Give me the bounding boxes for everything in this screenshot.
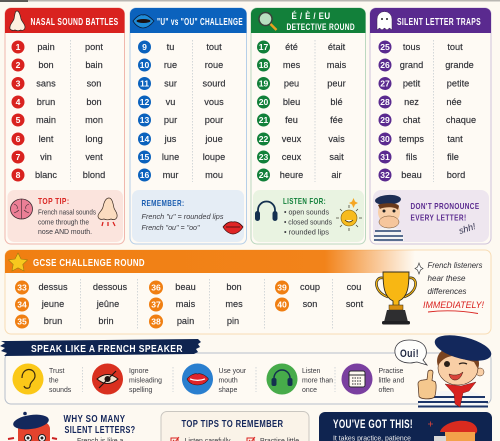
word pairs 17-24: peur (327, 78, 346, 88)
icon: blue lips (133, 15, 154, 28)
heading: detective round: É / È / EU (292, 11, 330, 22)
word pairs 25-32: chat (403, 115, 421, 125)
icon: character with red beret (434, 421, 477, 441)
word pairs 25-32: petit (403, 78, 421, 88)
word pairs 25-32: chaque (446, 115, 476, 125)
tip: use your mouth shape: Use your (218, 368, 247, 375)
panel: silent letter traps (370, 8, 491, 244)
word pairs 17-24: feu (285, 115, 298, 125)
callout: top tip (8, 190, 123, 242)
word pairs 9-16 (138, 40, 225, 182)
tip: use your mouth shape: mouth (218, 378, 238, 384)
callout: listen for (253, 190, 364, 242)
word pairs 25-32: 30 (380, 134, 390, 144)
icon: trophy (376, 272, 416, 324)
word pairs 1-8: lent (39, 134, 54, 144)
callout: remember (132, 190, 244, 242)
word pairs 17-24: 18 (259, 60, 268, 70)
word pairs 1-8: bon (38, 60, 54, 70)
word pairs 17-24: 20 (259, 97, 268, 107)
callout: remember: French "ou" = "oo" (142, 225, 200, 232)
word pairs 33-40: 35 (17, 316, 27, 326)
word pairs 17-24 (257, 40, 347, 182)
word pairs 33-40: 38 (151, 316, 161, 326)
word pairs 33-40: dessus (38, 282, 68, 292)
word pairs 33-40: bon (226, 282, 242, 292)
tip: ignore misleading spelling (92, 364, 162, 394)
character: silent letter mascot (8, 412, 57, 441)
word pairs 9-16: pur (164, 115, 177, 125)
word pairs 9-16: 15 (140, 152, 149, 162)
callout: French listeners: hear these (428, 274, 466, 283)
word pairs 1-8: bain (85, 60, 103, 70)
callout: remember: French "u" = rounded lips (142, 214, 224, 221)
callout: listen for: • closed sounds (284, 220, 333, 226)
word pairs 25-32: 29 (380, 115, 390, 125)
word pairs 9-16: rue (164, 60, 177, 70)
word pairs 9-16: mou (205, 170, 223, 180)
word pairs 33-40 (15, 280, 364, 328)
word pairs 17-24: fée (330, 115, 343, 125)
character: French boy with thumbs up (418, 330, 494, 408)
panel: top tips to remember (161, 412, 309, 441)
callout: French listeners: IMMEDIATELY! (423, 300, 484, 311)
tip: listen more than once: once (302, 387, 317, 394)
word pairs 17-24: peu (284, 78, 299, 88)
word pairs 1-8: 3 (16, 78, 21, 88)
word pairs 9-16: roue (205, 60, 223, 70)
word pairs 33-40: 37 (151, 300, 161, 310)
word pairs 17-24: ceux (282, 152, 302, 162)
word pairs 1-8: long (85, 134, 103, 144)
word pairs 17-24: vais (328, 134, 345, 144)
word pairs 25-32: beau (401, 170, 422, 180)
word pairs 33-40: brin (98, 316, 114, 326)
tip: trust the sounds: the (49, 378, 59, 384)
word pairs 25-32: grand (400, 60, 423, 70)
speech bubble: Oui!: Oui! (400, 348, 419, 360)
word pairs 9-16: joue (204, 134, 223, 144)
word pairs 25-32: grande (445, 60, 474, 70)
word pairs 9-16: mur (163, 170, 178, 180)
tip: practise little and often (342, 364, 404, 394)
word pairs 33-40: beau (175, 282, 196, 292)
word pairs 9-16: jus (164, 134, 177, 144)
word pairs 33-40: cou (347, 282, 361, 292)
word pairs 17-24: 24 (259, 170, 268, 180)
word pairs 1-8: brun (37, 97, 55, 107)
icon: star (8, 253, 28, 271)
word pairs 25-32: tant (447, 134, 463, 144)
callout: don't pronounce every letter (373, 190, 489, 242)
word pairs 17-24: 22 (259, 134, 268, 144)
tip: ignore misleading spelling: misleading (129, 378, 162, 384)
icon: magnifying glass (259, 12, 276, 30)
word pairs 33-40: jeûne (96, 299, 119, 309)
callout: listen for: • open sounds (284, 210, 330, 216)
word pairs 25-32: nez (404, 97, 419, 107)
word pairs 9-16: lune (162, 152, 179, 162)
word pairs 33-40: coup (300, 282, 320, 292)
tip: trust the sounds: sounds (49, 387, 72, 394)
word pairs 33-40: 33 (17, 282, 27, 292)
word pairs 25-32: fils (406, 152, 418, 162)
word pairs 33-40: 40 (277, 300, 287, 310)
word pairs 33-40: mais (176, 299, 196, 309)
word pairs 9-16: loupe (203, 152, 225, 162)
icon: boy covering mouth (373, 194, 404, 241)
icon: smiling sun (336, 198, 362, 231)
heading: why so many silent letters (64, 413, 136, 441)
heading: u vs ou challenge (130, 8, 246, 33)
word pairs 1-8: pain (37, 42, 55, 52)
word pairs 9-16: tout (206, 42, 222, 52)
icon: red lips (223, 222, 243, 234)
word pairs 25-32: petite (447, 78, 469, 88)
word pairs 9-16: 10 (140, 60, 149, 70)
word pairs 33-40: jeune (41, 299, 64, 309)
tip: listen more than once: more than (302, 378, 333, 384)
panel: speak like a French speaker (0, 339, 491, 404)
word pairs 17-24: veux (282, 134, 302, 144)
word pairs 9-16: 14 (140, 134, 149, 144)
callout: top tip: come through the (38, 220, 89, 226)
heading banner: SPEAK LIKE A FRENCH SPEAKER (31, 343, 183, 355)
word pairs 25-32: 32 (380, 170, 390, 180)
heading: silent letter traps (370, 8, 491, 33)
word pairs 1-8: 5 (16, 115, 21, 125)
word pairs 33-40: son (303, 299, 317, 309)
icon: nose with breath (98, 198, 117, 226)
word pairs 1-8: sans (36, 78, 56, 88)
tip: use your mouth shape (182, 364, 247, 394)
panel: you've got this: YOU'VE GOT THIS! (333, 419, 413, 431)
panel: nasal sound battles (5, 8, 124, 244)
heading: why so many silent letters: SILENT LETTERS? (64, 424, 136, 436)
word pairs 9-16: sourd (203, 78, 225, 88)
tip: trust the sounds (12, 364, 72, 394)
icon: nose (10, 11, 25, 31)
heading: why so many silent letters: WHY SO MANY (64, 413, 126, 425)
word pairs 33-40: sont (346, 299, 364, 309)
word pairs 33-40: 39 (277, 282, 287, 292)
word pairs 1-8: mon (85, 115, 103, 125)
word pairs 17-24: mes (283, 60, 301, 70)
word pairs 25-32: née (446, 97, 462, 107)
word pairs 9-16: 11 (140, 78, 149, 88)
heading: nasal sound battles (5, 8, 124, 33)
word pairs 33-40: brun (44, 316, 62, 326)
word pairs 1-8: bon (86, 97, 102, 107)
word pairs 17-24: était (328, 42, 346, 52)
word pairs 1-8: vin (40, 152, 52, 162)
panel: you've got this (319, 412, 492, 441)
word pairs 25-32: 27 (380, 78, 390, 88)
word pairs 25-32: 31 (380, 152, 390, 162)
word pairs 1-8: 8 (16, 170, 21, 180)
heading: u vs ou challenge: "U" vs "OU" CHALLENGE (157, 17, 243, 28)
speech bubble: Oui! (395, 340, 427, 365)
panel: GCSE challenge round (5, 250, 491, 334)
word pairs 33-40: pin (227, 316, 239, 326)
word pairs 17-24: bleu (283, 97, 300, 107)
word pairs 25-32: 26 (380, 60, 390, 70)
word pairs 33-40: pain (177, 316, 194, 326)
word pairs 17-24: heure (280, 170, 303, 180)
icon: brain (10, 199, 32, 219)
word pairs 17-24: mais (327, 60, 347, 70)
word pairs 25-32: 28 (380, 97, 390, 107)
word pairs 9-16: pour (205, 115, 223, 125)
word pairs 17-24: 23 (259, 152, 268, 162)
tip: practise little and often: little and (378, 378, 404, 384)
tip: use your mouth shape: shape (218, 387, 237, 394)
callout: top tip: French nasal sounds (38, 210, 97, 216)
word pairs 25-32: temps (399, 134, 424, 144)
callout: top tip: nose AND mouth. (38, 229, 92, 236)
panel: u vs ou challenge (130, 8, 246, 244)
heading: nasal sound battles: NASAL SOUND BATTLES (30, 17, 118, 28)
callout: French listeners (415, 261, 484, 314)
word pairs 1-8 (12, 40, 105, 182)
callout: listen for: LISTEN FOR: (283, 196, 326, 206)
callout: listen for: • rounded lips (284, 230, 330, 236)
word pairs 17-24: blé (330, 97, 343, 107)
word pairs 9-16: 16 (140, 170, 149, 180)
word pairs 25-32: 25 (380, 42, 390, 52)
word pairs 17-24: 17 (259, 42, 268, 52)
tip: listen more than once: Listen (302, 368, 321, 375)
word pairs 17-24: été (285, 42, 298, 52)
panel: top tips to remember: TOP TIPS TO REMEMBER (182, 419, 284, 430)
callout: French listeners: French listeners (428, 261, 482, 270)
word pairs 25-32: bord (447, 170, 465, 180)
word pairs 17-24: 19 (259, 78, 268, 88)
word pairs 33-40: 34 (17, 300, 27, 310)
word pairs 17-24: 21 (259, 115, 268, 125)
word pairs 1-8: main (36, 115, 56, 125)
word pairs 25-32: tous (403, 42, 421, 52)
word pairs 9-16: 9 (142, 42, 147, 52)
word pairs 25-32: file (447, 152, 459, 162)
word pairs 9-16: vu (166, 97, 175, 107)
word pairs 17-24: sait (329, 152, 344, 162)
word pairs 1-8: blond (83, 170, 105, 180)
word pairs 33-40: 36 (151, 282, 161, 292)
callout: remember: REMEMBER: (142, 198, 184, 208)
word pairs 9-16: vous (204, 97, 224, 107)
heading: detective round: DETECTIVE ROUND (286, 22, 355, 33)
word pairs 9-16: 12 (140, 97, 149, 107)
callout: don't pronounce every letter: EVERY LETTER! (410, 212, 466, 222)
tip: trust the sounds: Trust (49, 368, 65, 375)
word pairs 1-8: 1 (16, 42, 21, 52)
word pairs 1-8: pont (85, 42, 103, 52)
word pairs 9-16: 13 (140, 115, 149, 125)
heading: GCSE challenge round (5, 250, 415, 273)
heading: GCSE challenge round: GCSE CHALLENGE ROUND (33, 257, 145, 269)
word pairs 25-32: tout (447, 42, 463, 52)
callout: don't pronounce every letter: DON'T PRONOUNCE (410, 201, 480, 211)
word pairs 17-24: air (331, 170, 342, 180)
tip: practise little and often: Practise (378, 368, 404, 375)
word pairs 1-8: vent (85, 152, 103, 162)
callout: French listeners: differences (428, 287, 466, 296)
panel: detective round (251, 8, 366, 244)
word pairs 1-8: 7 (16, 152, 21, 162)
word pairs 9-16: sur (164, 78, 177, 88)
word pairs 1-8: 6 (16, 134, 21, 144)
word pairs 1-8: 4 (16, 97, 21, 107)
word pairs 1-8: 2 (16, 60, 21, 70)
word pairs 25-32 (378, 40, 476, 182)
word pairs 33-40: mes (225, 299, 243, 309)
callout: top tip: TOP TIP: (38, 196, 70, 206)
heading: detective round (251, 8, 366, 33)
word pairs 1-8: son (87, 78, 101, 88)
word pairs 9-16: tu (167, 42, 174, 52)
icon: headphones (255, 202, 278, 221)
icon: ghost (377, 12, 392, 30)
tip: ignore misleading spelling: Ignore (129, 368, 149, 375)
heading banner (0, 339, 201, 356)
callout: don't pronounce every letter: shh! (458, 221, 477, 236)
tip: listen more than once (266, 364, 333, 394)
tip: ignore misleading spelling: spelling (129, 387, 153, 394)
word pairs 1-8: blanc (35, 170, 57, 180)
tip: practise little and often: often (378, 387, 394, 394)
word pairs 33-40: dessous (93, 282, 128, 292)
